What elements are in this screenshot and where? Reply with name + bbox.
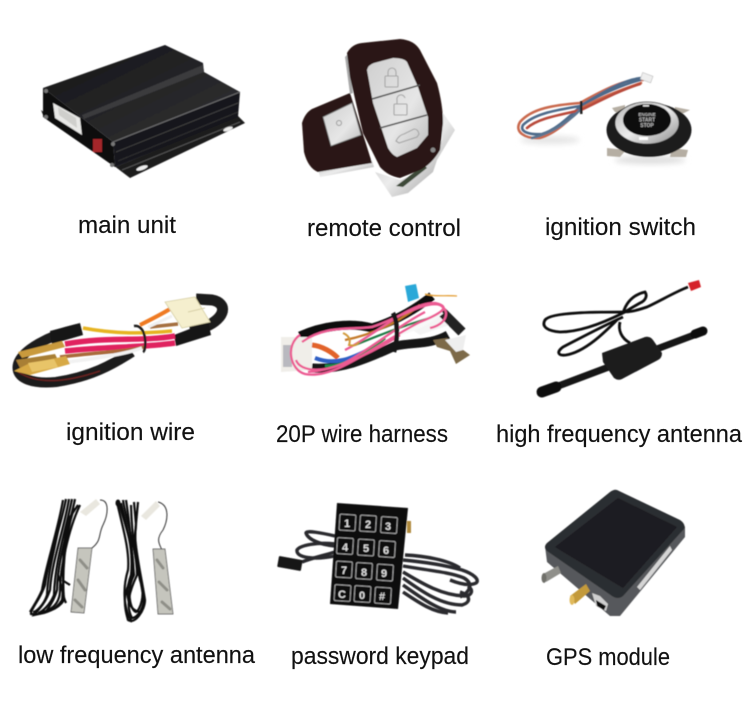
icon: low frequency antenna bbox=[30, 499, 173, 622]
label: GPS module: GPS module bbox=[546, 644, 670, 671]
icon: keypad cables: 2 bbox=[365, 519, 371, 531]
panel: ignition wire bbox=[14, 297, 223, 446]
label: password keypad: password keypad bbox=[291, 643, 469, 670]
label: ignition switch: ignition switch bbox=[545, 214, 696, 241]
icon: keypad cables: 4 bbox=[342, 542, 349, 554]
icon: wire harness bbox=[281, 284, 470, 375]
label: 20P wire harness: 20P wire harness bbox=[276, 421, 448, 448]
panel: remote control bbox=[302, 39, 461, 242]
icon: keypad cables bbox=[277, 503, 477, 613]
panel: high frequency antenna bbox=[496, 280, 743, 448]
icon: ignition wire loom bbox=[14, 297, 223, 382]
icon: start stop button: STOP bbox=[640, 123, 654, 129]
icon: key fobs bbox=[302, 39, 455, 197]
icon: keypad cables: C bbox=[338, 589, 346, 601]
panel: ignition switch bbox=[518, 73, 696, 241]
icon: keypad cables: 1 bbox=[344, 518, 350, 530]
icon: keypad cables: 0 bbox=[359, 590, 365, 602]
icon: keypad cables: 9 bbox=[381, 568, 387, 580]
icon: keypad cables: 5 bbox=[363, 543, 369, 555]
label: remote control: remote control bbox=[307, 215, 461, 242]
label: low frequency antenna: low frequency antenna bbox=[18, 642, 256, 669]
icon: keypad cables: # bbox=[379, 591, 385, 603]
icon: GPS module bbox=[542, 490, 685, 616]
label: ignition wire: ignition wire bbox=[66, 419, 195, 446]
icon: keypad cables: 6 bbox=[383, 545, 389, 557]
panel: main unit bbox=[41, 45, 245, 239]
panel: 20P wire harness bbox=[276, 284, 470, 448]
icon: keypad cables: 8 bbox=[361, 567, 367, 579]
icon: keypad cables: 3 bbox=[385, 521, 391, 533]
label: main unit: main unit bbox=[78, 212, 176, 239]
icon: main unit box bbox=[41, 45, 245, 178]
icon: start stop button: ENGINE bbox=[638, 112, 656, 117]
panel: low frequency antenna bbox=[18, 499, 256, 669]
label: high frequency antenna: high frequency antenna bbox=[496, 421, 743, 448]
panel: GPS module bbox=[542, 490, 685, 671]
icon: start stop button bbox=[518, 73, 692, 164]
icon: high frequency antenna bbox=[542, 280, 703, 392]
panel: password keypad bbox=[277, 503, 477, 670]
icon: keypad cables: 7 bbox=[341, 565, 347, 577]
icon: start stop button: START bbox=[639, 118, 655, 124]
